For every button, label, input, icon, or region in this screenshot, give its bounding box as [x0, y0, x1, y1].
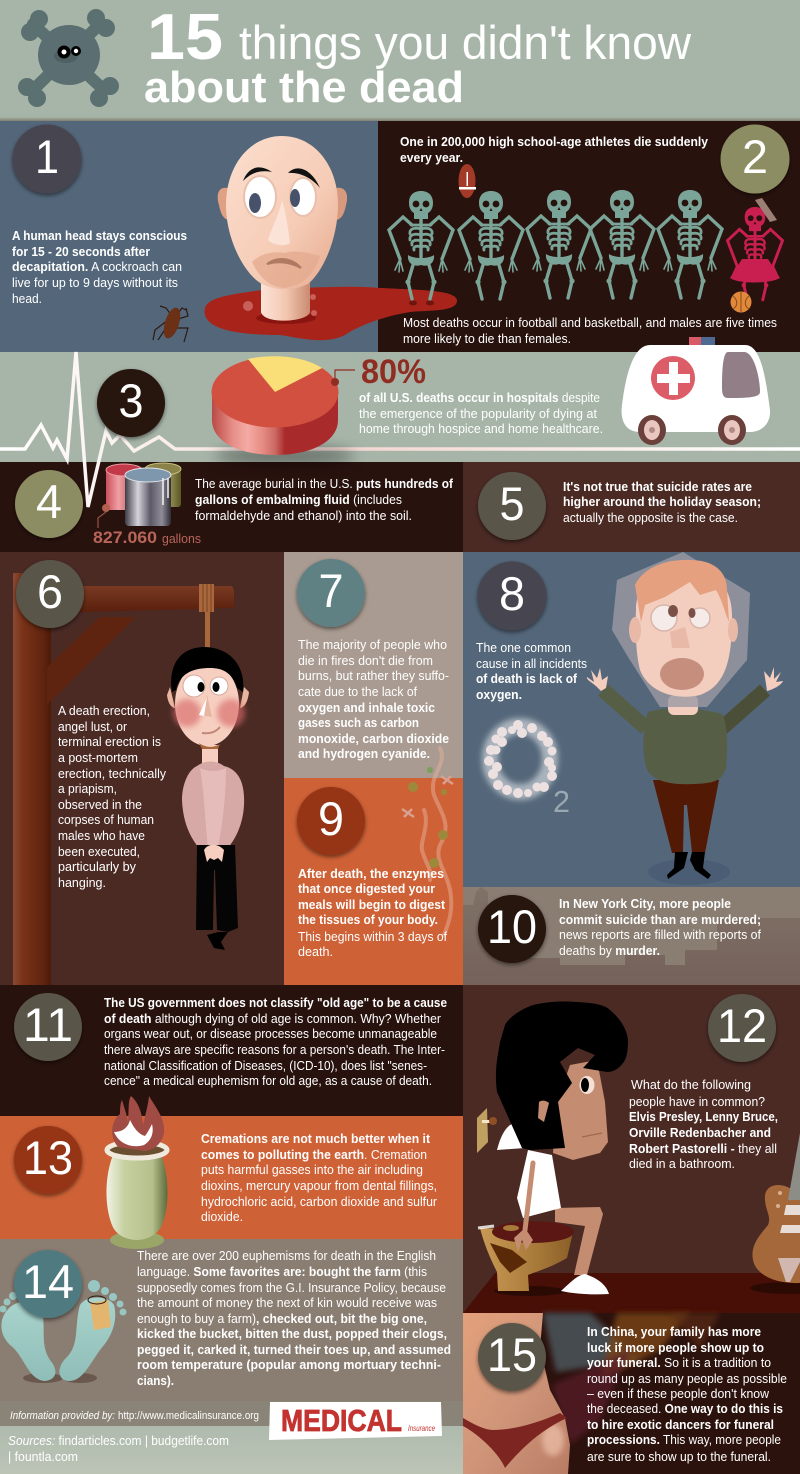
fact 6 text: been executed, [58, 845, 140, 859]
icon: paint cans [98, 463, 181, 528]
number badge 6: 6 [37, 565, 63, 618]
icon: skull and crossbones [18, 9, 119, 107]
fact 14 text: language. Some favorites are: bought the farm (this [137, 1265, 427, 1279]
number badge 14 [14, 1250, 82, 1318]
panel 4 background [0, 462, 463, 552]
fact 14 text: the amount of money the next of kin would receive was [137, 1296, 437, 1310]
fact 15 text: In China, your family has more [587, 1325, 761, 1339]
fact 15 text: are sure to show up to the funeral. [587, 1450, 771, 1464]
fact 12 text [629, 1078, 778, 1171]
medical insurance logo: MEDICAL [281, 1403, 402, 1438]
fact 4 text: 827.060 [93, 529, 157, 547]
leg [555, 1207, 603, 1275]
icon: cockroach [153, 306, 188, 342]
fact 6 text: observed in the [58, 798, 142, 812]
icon: pearl O2 ring [484, 720, 570, 819]
fact 3 text: 80% [361, 353, 426, 391]
fact 7 text: and hydrogen cyanide. [298, 747, 430, 761]
fact 10 text: In New York City, more people [559, 897, 731, 911]
fact 8 text: of death is lack of [476, 672, 578, 686]
fact 13 text: comes to polluting the earth. Cremation [201, 1148, 427, 1162]
fact 6 text: corpses of human [58, 813, 154, 827]
panel 11 background [0, 985, 463, 1116]
title: 15 [147, 0, 223, 73]
credit strip [0, 1401, 463, 1426]
toilet [480, 1228, 573, 1291]
number badge 12 [708, 994, 776, 1062]
fact 3 text: of all U.S. deaths occur in hospitals despite [359, 391, 600, 405]
fact 2 text [400, 135, 777, 346]
number badge 15 [478, 1323, 546, 1391]
number badge 2 [720, 124, 790, 194]
number badge 1: 1 [35, 130, 59, 183]
title [144, 0, 692, 112]
sources [8, 1433, 229, 1464]
number badge 14: 14 [22, 1255, 74, 1308]
fact 1 text: for 15 - 20 seconds after [12, 245, 150, 259]
number badge 11 [14, 993, 82, 1061]
number badge 5 [478, 472, 546, 540]
fact 8 text [476, 641, 587, 702]
panel 3 background [0, 352, 800, 462]
fact 9 text: After death, the enzymes [298, 867, 444, 881]
fact 14 text: pegged it, carked it, turned their toes up, and assumed [137, 1343, 451, 1357]
fact 6 text: angel lust, or [58, 720, 127, 734]
fact 5 text: higher around the holiday season; [563, 495, 761, 509]
fact 15 text: the deceased. One way to do this is [587, 1402, 783, 1416]
fact 13 text: puts harmful gasses into the air including [201, 1163, 423, 1177]
fact 15 text: your funeral. So it is a tradition to [587, 1356, 771, 1370]
fact 13 text: dioxins, mercury vapour from dental fillings, [201, 1179, 437, 1193]
panel 1 background [0, 121, 378, 352]
number badge 15: 15 [487, 1328, 537, 1381]
fact 2 text: every year. [400, 151, 463, 165]
icon: ambulance [622, 337, 770, 445]
fact 8 text: The one common [476, 641, 571, 655]
city skyline [463, 887, 800, 985]
fact 4 text: formaldehyde and ethanol) into the soil. [195, 509, 412, 523]
fact 13 text: Cremations are not much better when it [201, 1132, 431, 1146]
fact 12 text: What do the following [631, 1078, 751, 1092]
fact 7 text: burns, but rather they suffo- [298, 669, 449, 683]
panel 6 background [0, 552, 284, 985]
neck [261, 270, 310, 321]
number badge 2: 2 [742, 130, 768, 183]
fact 13 text: hydrochloric acid, carbon dioxide and sulfur [201, 1195, 437, 1209]
face [636, 566, 732, 697]
number badge 5: 5 [500, 477, 524, 530]
fact 1 text: live for up to 9 days without its [12, 276, 178, 290]
fact 7 text [298, 638, 449, 761]
fact 14 text: supposedly comes from the G.I. Insurance Policy, because [137, 1281, 446, 1295]
fact 4 text: gallons of embalming fluid (includes [195, 493, 402, 507]
fact 11 text: national Classification of Diseases, (ICD-10), does list "senes- [104, 1059, 427, 1073]
hair [496, 1001, 628, 1150]
number badge 13 [14, 1126, 82, 1194]
hair [635, 560, 729, 622]
fact 1 text: decapitation. A cockroach can [12, 260, 182, 274]
fact 14 text: enough to buy a farm), checked out, bit the big one, [137, 1312, 427, 1326]
fact 9 text [298, 867, 448, 959]
pink skeleton [727, 198, 783, 300]
panel 5 background [463, 462, 800, 552]
fact 15 text: processions. This way, more people [587, 1433, 781, 1447]
fact 6 text: erection, technically [58, 767, 167, 781]
fact 11 text: The US government does not classify "old age" to be a cause [104, 996, 447, 1010]
fact 2 text: One in 200,000 high school-age athletes die suddenly [400, 135, 708, 149]
icon: feet with toe tag [0, 1280, 126, 1383]
icon: cremation urn with flames [106, 1096, 168, 1249]
fact 10 text: commit suicide than are murdered; [559, 913, 761, 927]
panel 8 background [463, 552, 800, 887]
panel 14 background [0, 1239, 463, 1401]
fact 11 text [104, 996, 447, 1088]
fact 11 text: cence" a medical euphemism for old age, as a cause of death. [104, 1074, 432, 1088]
skeleton row [389, 190, 722, 306]
title: things you didn't know [239, 16, 692, 69]
panel 12 background [463, 985, 800, 1313]
fact 9 text: death. [298, 945, 333, 959]
ears [218, 188, 230, 220]
seated man on toilet [478, 1001, 628, 1296]
panel 13 background [0, 1116, 463, 1239]
panel: header background [0, 0, 800, 121]
plastic bag [612, 552, 750, 707]
fact 7 text: oxygen and inhale toxic [298, 701, 435, 715]
neck [668, 695, 698, 715]
fact 10 text [559, 897, 762, 958]
fact 12 text: died in a bathroom. [629, 1157, 735, 1171]
fact 7 text: monoxide, carbon dioxide [298, 732, 449, 746]
number badge 9 [297, 787, 365, 855]
number badge 3 [97, 369, 165, 437]
heartbeat line [0, 352, 800, 507]
sources: | fountla.com [8, 1449, 78, 1464]
fact 7 text: gases such as carbon [298, 716, 419, 730]
decay steam and flies [402, 748, 453, 935]
blood pool [205, 287, 457, 340]
fact 8 text: oxygen. [476, 688, 522, 702]
fact 15 text: to hire exotic dancers for funeral [587, 1418, 774, 1432]
fact 9 text: the tissues of your body. [298, 913, 438, 927]
number badge 1 [12, 124, 82, 194]
panel 7 background [284, 552, 463, 778]
fact 6 text: males who have [58, 829, 145, 843]
number badge 13: 13 [23, 1131, 73, 1184]
fact 8 text: cause in all incidents [476, 657, 587, 671]
fact 12 text: Orville Redenbacher and [629, 1126, 771, 1140]
fact 11 text: of death although dying of old age is common. Why? Whether [104, 1012, 441, 1026]
icon: basketball [730, 292, 752, 312]
fact 6 text: A death erection, [58, 704, 150, 718]
credit strip: Information provided by: [10, 1410, 115, 1422]
fact 1 text [12, 229, 187, 306]
number badge 10 [478, 895, 546, 963]
shirt [517, 1150, 561, 1218]
header shadow edge [0, 117, 800, 121]
collar [497, 1124, 525, 1150]
stage light rays [543, 1313, 720, 1445]
number badge 7 [297, 559, 365, 627]
fact 14 text: There are over 200 euphemisms for death in the English [137, 1249, 436, 1263]
fact 13 text [201, 1132, 437, 1224]
fact 6 text: terminal erection is [58, 735, 161, 749]
fact 2 text: Most deaths occur in football and basketball, and males are five times [403, 316, 777, 330]
panel 2 background [378, 121, 800, 352]
number badge 10: 10 [487, 900, 537, 953]
number badge 4 [15, 470, 83, 538]
eye [580, 1076, 594, 1094]
fact 15 text [587, 1325, 787, 1464]
hanged man [167, 647, 249, 950]
fact 5 text: It's not true that suicide rates are [563, 480, 752, 494]
fact 6 text: a post-mortem [58, 751, 138, 765]
sweater and arms [603, 690, 646, 728]
gallows [13, 573, 234, 985]
fact 9 text: This begins within 3 days of [298, 930, 448, 944]
fact 10 text: news reports are filled with reports of [559, 928, 762, 942]
face [553, 1060, 608, 1160]
fact 9 text: that once digested your [298, 882, 435, 896]
fact 1: head illustration [205, 136, 457, 340]
fact 10 text: deaths by murder. [559, 944, 660, 958]
fact 12 text: people have in common? [629, 1095, 765, 1109]
fact 5 text: actually the opposite is the case. [563, 511, 738, 525]
credit strip: http://www.medicalinsurance.org [118, 1410, 259, 1422]
fact 11 text: there always are specific reasons for a person's death. The Inter- [104, 1043, 445, 1057]
fact 4 text [93, 477, 454, 547]
number badge 8: 8 [499, 567, 525, 620]
number badge 6 [16, 560, 84, 628]
fact 7 text: cate due to the lack of [298, 685, 418, 699]
panel 15 background [463, 1313, 800, 1474]
fact 12 text: Robert Pastorelli - they all [629, 1142, 777, 1156]
fact 14 text: kicked the bucket, bitten the dust, popped their clogs, [137, 1327, 447, 1341]
dancer torso [463, 1313, 570, 1474]
fact 3 text: the emergence of the popularity of dying at [359, 407, 598, 421]
number badge 3: 3 [118, 374, 144, 427]
fact 15 text: – even if these people don't know [587, 1387, 770, 1401]
fact 13 text: dioxide. [201, 1210, 243, 1224]
suffocating man with plastic bag [587, 552, 783, 885]
icon: football [458, 164, 476, 198]
panel 9 background [284, 778, 463, 985]
fact 6 text: a priapism, [58, 782, 117, 796]
fact 14 text: cians). [137, 1374, 174, 1388]
fact 6 text [58, 704, 167, 890]
arm [525, 1163, 533, 1230]
fact 3 text: home through hospice and home healthcare. [359, 422, 603, 436]
number badge 4: 4 [36, 475, 62, 528]
panel 10 background [463, 887, 800, 985]
fact 7 text: die in fires don't die from [298, 654, 433, 668]
footer background [0, 1401, 463, 1474]
number badge 12: 12 [717, 999, 767, 1052]
trousers [653, 780, 719, 853]
title: about the dead [144, 63, 464, 112]
fact 1 text: head. [12, 292, 42, 306]
pie chart: 80 percent [212, 356, 355, 466]
number badge 8 [478, 562, 546, 630]
number badge 11: 11 [23, 998, 73, 1051]
fact 6 text: particularly by [58, 860, 137, 874]
sources: Sources: findarticles.com | budgetlife.com [8, 1433, 229, 1448]
number badge 7: 7 [318, 564, 344, 617]
fact 11 text: organs wear out, or disease processes become unmanageable [104, 1027, 437, 1041]
fact 15 text: round up as many people as possible [587, 1372, 787, 1386]
shoes [667, 852, 711, 879]
fact 9 text: meals will begin to digest [298, 898, 446, 912]
icon: light switch [477, 1108, 497, 1153]
floor [463, 1273, 800, 1313]
fact 7 text: The majority of people who [298, 638, 447, 652]
number badge 9: 9 [318, 792, 344, 845]
fact 15 text: luck if more people show up to [587, 1341, 764, 1355]
fact 6 text: hanging. [58, 876, 106, 890]
fact 5 text [563, 480, 761, 525]
fact 14 text [137, 1249, 451, 1388]
fact 12 text: Elvis Presley, Lenny Bruce, [629, 1110, 778, 1124]
shoe [561, 1274, 609, 1294]
fact 2 text: more likely to die than females. [403, 332, 571, 346]
fact 4 text: The average burial in the U.S. puts hundreds of [195, 477, 454, 491]
fact 4 text: gallons [162, 532, 201, 546]
icon: pearl O2 ring: 2 [553, 784, 570, 819]
icon: guitar [750, 1133, 800, 1294]
fact 3 text [359, 353, 603, 436]
fact 14 text: room temperature (popular among mortuary techni- [137, 1358, 441, 1372]
fact 1 text: A human head stays conscious [12, 229, 187, 243]
head shape [226, 136, 338, 289]
medical insurance logo: Insurance [408, 1424, 435, 1433]
eyes [244, 176, 276, 218]
